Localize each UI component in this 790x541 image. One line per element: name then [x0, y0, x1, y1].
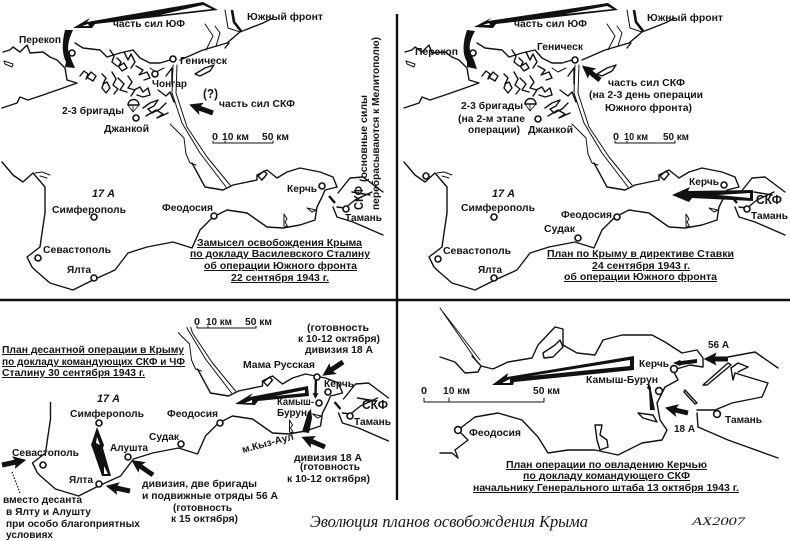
panel: plan of 22 September 1943 [2, 2, 383, 290]
map labels: Керчь [639, 359, 669, 370]
caption: начальнику Генерального штаба 13 октября 1943 г. [473, 482, 739, 494]
map labels: Керчь [689, 177, 719, 188]
arrow: to Kerch [673, 359, 697, 366]
map labels: Чонгар [152, 79, 187, 90]
caption [547, 249, 734, 283]
arrow: part of Southern Front forces [474, 3, 618, 28]
note: instead of landing [3, 495, 140, 541]
map labels: Севастополь [43, 245, 111, 256]
front line: Southern Front [232, 10, 241, 31]
map labels: Симферополь [461, 202, 535, 214]
map labels: м.Кыз-Аул [241, 432, 295, 456]
arrow: to Kamysh-Burun [647, 383, 655, 410]
map labels: Тамань [354, 417, 391, 428]
scale bar: 50 км [663, 132, 689, 143]
map labels: 56 А [708, 340, 729, 351]
city markers [40, 374, 353, 487]
map labels: Симферополь [70, 408, 144, 420]
map labels: СКФ [756, 193, 782, 207]
map labels: Симферополь [52, 204, 126, 216]
map labels: (готовность [300, 462, 360, 473]
arrow: part of North Caucasus Front forces [199, 108, 213, 113]
caption [2, 345, 185, 379]
scale bar: 0 [613, 132, 619, 143]
map: Crimea outline [2, 10, 383, 290]
map labels: 17 А [492, 188, 515, 200]
caption: 24 сентября 1943 г. [592, 260, 690, 272]
scale bar: 10 км [222, 132, 249, 143]
arrow: hook to Perekop [464, 30, 477, 69]
map labels: Бурун [277, 408, 307, 419]
map labels [469, 340, 762, 439]
arrow: part of Southern Front forces [73, 2, 218, 28]
map labels: часть сил СКФ [608, 78, 685, 89]
note: instead of landing: при особо благоприятных [6, 518, 140, 530]
arrow: 18 A [675, 410, 688, 413]
map labels: часть сил ЮФ [113, 19, 185, 30]
scale bar: 50 км [245, 317, 272, 328]
map labels: Перекоп [19, 35, 61, 46]
caption: Сталину 30 сентября 1943 г. [2, 367, 145, 379]
icon: parachute [128, 100, 139, 112]
arrow: part of North Caucasus Front forces [590, 72, 600, 80]
map labels: СКФ [362, 398, 388, 412]
rotated note: main forces redeployed to Melitopol [352, 37, 382, 210]
map labels: часть сил СКФ [219, 99, 295, 110]
map labels: 17 А [97, 393, 120, 405]
map labels [19, 11, 382, 276]
map labels: Севастополь [443, 246, 511, 257]
map labels: 2-3 бригады [461, 100, 523, 112]
scale bar: 10 км [206, 317, 232, 328]
map labels: Феодосия [167, 409, 218, 420]
map labels: (?) [203, 87, 218, 101]
rotated note: main forces redeployed to Melitopol: перебрасываются к Мелитополю) [370, 37, 382, 210]
icon: parachute [525, 99, 536, 111]
map labels: к 10-12 октября) [298, 333, 380, 345]
caption: Замысел освобождения Крыма [197, 237, 362, 249]
map labels: Перекоп [415, 47, 458, 58]
map labels: 17 А [92, 188, 115, 200]
title: Эволюция планов освобождения Крыма [310, 512, 588, 531]
arrow: to Alushta [140, 466, 153, 475]
map labels: Ялта [67, 265, 91, 276]
rotated note: main forces redeployed to Melitopol: СКФ [352, 186, 366, 210]
map labels: 18 А [674, 424, 695, 435]
panel: Kerch operation plan of 13 October 1943 [421, 308, 778, 494]
front line: Southern Front [634, 10, 643, 31]
map labels: Тамань [751, 211, 788, 222]
scale bar: 50 км [533, 386, 560, 397]
map labels: Судак [149, 432, 180, 443]
scale bar [194, 317, 272, 328]
map labels: операции) [468, 125, 520, 136]
arrow: alternative landing at Sevastopol [2, 462, 16, 465]
signature: АХ2007 [691, 514, 746, 528]
map labels: Камыш-Бурун [586, 375, 658, 386]
map labels: Тамань [345, 213, 382, 224]
arrow: down to Kamysh-Burun [314, 378, 317, 394]
arrow: main thrust toward Feodosia [492, 356, 634, 385]
map labels: (на 2-3 день операции [589, 90, 703, 101]
map labels: Геническ [180, 56, 228, 67]
map labels: дивизия 18 А [294, 453, 362, 464]
arrow: hook to Perekop [63, 30, 75, 68]
city markers [423, 50, 750, 281]
caption: План десантной операции в Крыму [2, 345, 184, 356]
scale bar: 0 [212, 132, 218, 143]
caption: по докладу Василевского Сталину [190, 249, 370, 260]
city markers [455, 366, 720, 433]
panel: landing plan of 30 September 1943 [2, 318, 391, 540]
map labels: Феодосия [162, 203, 213, 214]
map: Kerch peninsula outline [440, 308, 778, 458]
map labels: к 15 октября) [171, 513, 238, 525]
map labels: Тамань [725, 415, 762, 426]
caption: об операции Южного фронта [204, 260, 357, 272]
map labels: Камыш- [277, 397, 314, 408]
scale bar: 10 км [624, 132, 648, 143]
map labels: к 10-12 октября) [287, 473, 370, 485]
arrow: main thrust from Kerch [235, 386, 309, 405]
caption: План операции по овладению Керчью [506, 460, 707, 471]
map labels: Феодосия [561, 210, 612, 221]
scale bar [421, 386, 560, 402]
rotated note: main forces redeployed to Melitopol: (основные силы [359, 95, 370, 182]
map labels: и подвижные отряды 56 А [142, 491, 278, 502]
scale bar: 50 км [262, 132, 289, 143]
arrow: 56 A [714, 356, 728, 362]
map: Crimea outline [32, 327, 390, 497]
scale bar: 10 км [443, 386, 470, 397]
map labels [415, 12, 788, 276]
arrow: North Caucasus Front main thrust [672, 187, 753, 202]
map labels: Южный фронт [647, 12, 723, 24]
map labels: (на 2-м этапе [458, 114, 525, 125]
map labels: Мама Русская [243, 360, 315, 371]
dotted link [12, 472, 20, 493]
map labels: Феодосия [469, 428, 521, 439]
map: Crimea outline [404, 10, 785, 290]
map labels: Судак [544, 224, 576, 235]
map labels: Алушта [110, 443, 148, 454]
map labels: дивизия 18 А [305, 345, 373, 356]
caption [473, 460, 739, 494]
scale bar: 0 [421, 386, 427, 397]
map labels: Севастополь [12, 448, 79, 459]
map labels: 2-3 бригады [62, 105, 124, 117]
scale bar: 0 [194, 317, 200, 328]
caption: по докладу командующих СКФ и ЧФ [2, 357, 185, 368]
map labels: Джанкой [528, 125, 573, 136]
scale bar [212, 132, 289, 143]
caption [190, 237, 370, 284]
note: instead of landing: условиях [6, 530, 53, 541]
map labels: Ялта [478, 265, 502, 276]
map labels: часть сил ЮФ [514, 19, 587, 30]
map labels: (готовность [307, 323, 369, 334]
panel: directive of 24 September 1943 [404, 3, 788, 290]
map labels: Южный фронт [247, 11, 323, 23]
map labels: (готовность [173, 503, 232, 514]
map labels: дивизия, две бригады [142, 478, 257, 490]
map labels: Джанкой [104, 124, 149, 135]
city markers [35, 50, 349, 281]
map labels: Геническ [537, 42, 584, 53]
caption: План по Крыму в директиве Ставки [547, 249, 734, 260]
arrow: to Yalta [116, 488, 130, 491]
note: instead of landing: вместо десанта [3, 495, 82, 506]
arrow: division 18 A toward Mama Russkaya [331, 362, 343, 370]
map labels: Ялта [69, 475, 93, 486]
caption: об операции Южного фронта [564, 271, 717, 283]
note: instead of landing: в Ялту и Алушту [6, 507, 91, 518]
caption: 22 сентября 1943 г. [231, 272, 329, 284]
map labels: Керчь [287, 184, 317, 195]
arrow: up to Kamysh-Burun [302, 409, 312, 433]
scale bar [613, 132, 689, 143]
map labels: Южного фронта) [605, 102, 692, 114]
arrow: division 18 A from Kyz-Aul [311, 441, 325, 447]
map labels [12, 323, 391, 525]
caption: по докладу командующего СКФ [523, 471, 690, 482]
map labels: Керчь [324, 379, 354, 390]
arrow: to Simferopol [91, 427, 111, 476]
